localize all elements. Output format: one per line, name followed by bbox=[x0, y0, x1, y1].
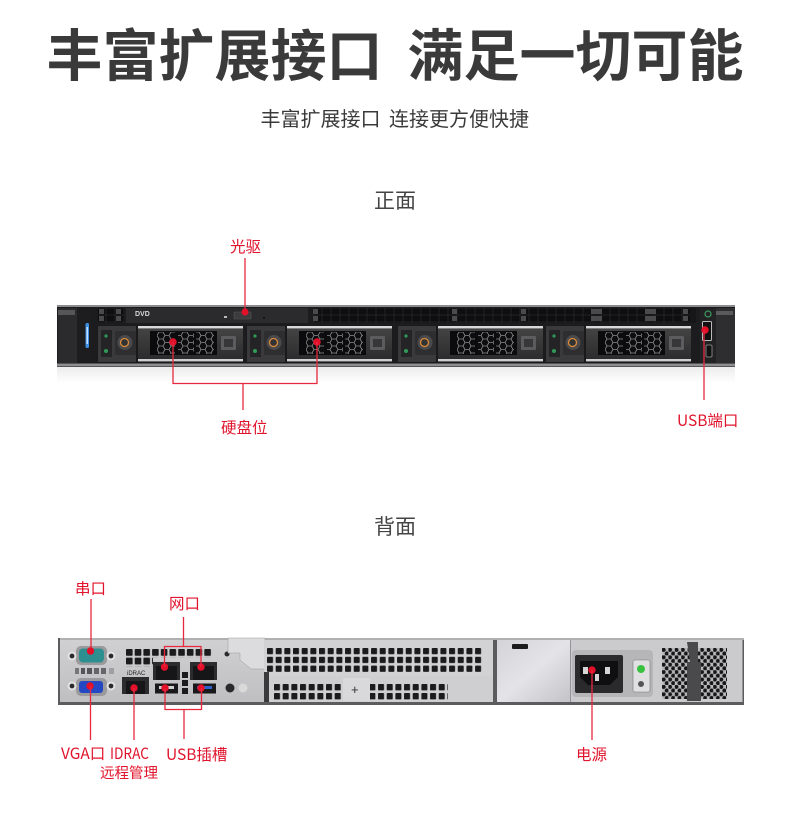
callout: optical drive: 光驱 bbox=[230, 235, 261, 257]
heading: front view: 正面 bbox=[374, 190, 416, 213]
callout: optical drive bbox=[230, 235, 261, 316]
rear IO plate bbox=[60, 640, 264, 702]
callout: power socket bbox=[576, 666, 607, 765]
power socket bbox=[575, 655, 623, 693]
subtitle: 丰富扩展接口 bbox=[260, 108, 380, 131]
iDRAC port bbox=[122, 671, 149, 694]
panel: front of server bbox=[57, 305, 735, 383]
reflection bbox=[57, 367, 735, 383]
network ports bbox=[153, 662, 217, 680]
indicator squares bbox=[75, 668, 114, 674]
callout: iDRAC remote management: IDRAC bbox=[110, 742, 149, 764]
top vents bbox=[97, 308, 696, 323]
callout: drive bays: 硬盘位 bbox=[221, 416, 268, 438]
subtitle bbox=[260, 108, 529, 131]
power supply bbox=[570, 640, 742, 702]
PSU vent bbox=[662, 648, 727, 699]
drive bay 4 bbox=[545, 325, 691, 363]
low profile slot cover bbox=[264, 672, 493, 702]
panel: rear of server bbox=[58, 638, 744, 705]
PSU handle bbox=[687, 642, 701, 701]
title bbox=[46, 25, 744, 88]
callout: serial port: 串口 bbox=[75, 577, 106, 599]
drive bay 3 bbox=[397, 325, 543, 363]
optical drive bbox=[126, 308, 308, 323]
callout: USB slots bbox=[161, 684, 227, 765]
serial port bbox=[68, 646, 116, 665]
callout: USB slots: USB插槽 bbox=[166, 743, 227, 765]
drive bay 1 bbox=[97, 325, 243, 363]
title: 满足一切可能 bbox=[408, 25, 744, 88]
optical drive: DVD bbox=[135, 311, 150, 318]
callout: iDRAC remote management: 远程管理 bbox=[100, 762, 158, 783]
callout: VGA port bbox=[61, 682, 105, 764]
callout: front USB port bbox=[677, 326, 738, 431]
PCI slot cover bbox=[264, 640, 493, 676]
riser bracket bbox=[228, 638, 265, 669]
USB ports bbox=[155, 684, 216, 694]
callout: power socket: 电源 bbox=[576, 743, 607, 765]
callout: iDRAC remote management bbox=[100, 684, 158, 783]
centre cover bbox=[497, 640, 570, 702]
left control panel bbox=[58, 308, 92, 363]
callout: front USB port: USB端口 bbox=[677, 409, 738, 431]
drive bay 2 bbox=[246, 325, 392, 363]
subtitle: 连接更方便快捷 bbox=[389, 108, 529, 131]
chassis bbox=[57, 305, 735, 367]
callout: network ports: 网口 bbox=[169, 592, 200, 614]
low profile slot cover: + bbox=[351, 682, 359, 697]
title: 丰富扩展接口 bbox=[46, 25, 382, 88]
iDRAC port: iDRAC bbox=[127, 671, 146, 677]
right control panel bbox=[700, 308, 735, 363]
status LED bbox=[633, 660, 650, 692]
power button and screw bbox=[226, 684, 234, 692]
callout: drive bays bbox=[169, 338, 321, 438]
callout: network ports bbox=[161, 592, 205, 671]
heading: rear view: 背面 bbox=[374, 516, 416, 539]
callout: serial port bbox=[75, 577, 106, 655]
VGA port bbox=[68, 678, 116, 696]
callout: VGA port: VGA口 bbox=[61, 742, 105, 764]
